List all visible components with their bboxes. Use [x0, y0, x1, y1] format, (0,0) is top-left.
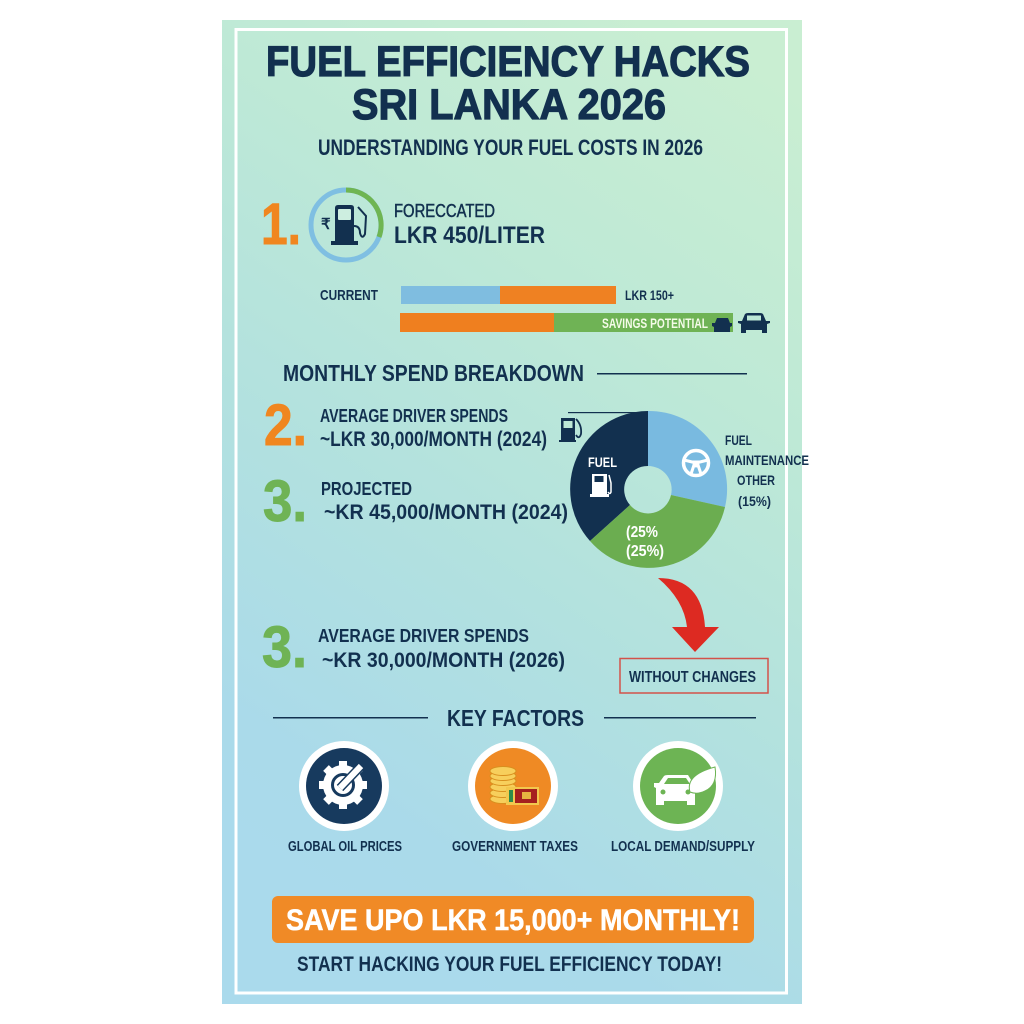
- current label: CURRENT: [320, 287, 378, 304]
- panel: background: [222, 20, 802, 1004]
- item 3: average driver 2026: [262, 615, 565, 680]
- factor: global oil prices: GLOBAL OIL PRICES: [288, 839, 402, 855]
- number 1: 1.: [261, 192, 301, 257]
- factor: government taxes: [452, 741, 578, 855]
- item 3: average driver 2026: ~KR 30,000/MONTH (2026): [322, 649, 565, 672]
- item 3: average driver 2026: 3.: [262, 615, 307, 680]
- item 2: average driver spends: ~LKR 30,000/MONTH (2024): [320, 428, 547, 451]
- item 2: average driver spends: 2.: [264, 393, 307, 458]
- item 2: average driver spends: [264, 393, 547, 458]
- slice: other: [590, 495, 725, 568]
- icon: fuel pump in ring: [311, 190, 381, 260]
- title: FUEL EFFICIENCY HACKS: [266, 38, 750, 86]
- icon: fuel pump in ring: ₹: [321, 216, 331, 233]
- call to action: START HACKING YOUR FUEL EFFICIENCY TODAY!: [297, 953, 722, 976]
- slice: fuel: [570, 411, 648, 541]
- fuel label: FUEL: [588, 454, 617, 470]
- banner: save monthly: SAVE UPO LKR 15,000+ MONTHLY!: [286, 904, 740, 937]
- subtitle: UNDERSTANDING YOUR FUEL COSTS IN 2026: [318, 135, 703, 160]
- item 3: projected: PROJECTED: [321, 479, 412, 499]
- icon: steering wheel: [684, 450, 708, 476]
- savings bar: SAVINGS POTENTIAL: [602, 316, 708, 331]
- pie chart: monthly spend: [570, 411, 727, 568]
- item 3: projected: ~KR 45,000/MONTH (2024): [324, 501, 568, 524]
- banner: save monthly: [272, 896, 754, 943]
- title: [266, 38, 750, 129]
- item 2: average driver spends: AVERAGE DRIVER SPENDS: [320, 406, 508, 426]
- factor: global oil prices: [288, 741, 402, 855]
- factor: local demand/supply: LOCAL DEMAND/SUPPLY: [611, 839, 755, 855]
- current bar: [401, 286, 616, 304]
- item 3: average driver 2026: AVERAGE DRIVER SPENDS: [318, 626, 529, 646]
- pie legend: MAINTENANCE: [725, 452, 809, 468]
- section 1: forecast: [261, 190, 545, 260]
- pie legend: OTHER: [737, 472, 775, 488]
- pie legend: [725, 432, 809, 509]
- pie legend: (15%): [738, 493, 771, 509]
- icon: coins and flag: [468, 741, 558, 831]
- slice: maintenance: [648, 411, 727, 507]
- icon: gear: [299, 741, 389, 831]
- factor: government taxes: GOVERNMENT TAXES: [452, 839, 578, 855]
- icon: small car: [712, 318, 732, 332]
- pie legend: FUEL: [725, 432, 752, 448]
- icon: white fuel pump: [590, 474, 611, 497]
- heading: monthly spend breakdown: MONTHLY SPEND BREAKDOWN: [283, 360, 584, 386]
- item 3: projected: [263, 469, 568, 534]
- arrow: red curved down: [658, 578, 719, 652]
- callout: without changes: WITHOUT CHANGES: [629, 669, 756, 686]
- savings bar: [400, 313, 733, 332]
- icon: dark fuel pump with leader: [559, 412, 643, 442]
- slice values: (25%: [626, 524, 658, 541]
- title: SRI LANKA 2026: [352, 81, 666, 129]
- item 3: projected: 3.: [263, 469, 307, 534]
- icon: car: [738, 313, 770, 333]
- factor: local demand/supply: [611, 741, 755, 855]
- icon: eco car: [633, 741, 723, 831]
- heading: key factors: KEY FACTORS: [447, 705, 584, 731]
- callout: without changes: [620, 658, 768, 693]
- current value: LKR 150+: [625, 287, 674, 303]
- pie chart: monthly spend: (25%): [626, 543, 664, 560]
- forecast label: FORECCATED: [394, 201, 495, 221]
- bar chart: current vs savings: [320, 286, 770, 333]
- forecast price: LKR 450/LITER: [394, 222, 545, 249]
